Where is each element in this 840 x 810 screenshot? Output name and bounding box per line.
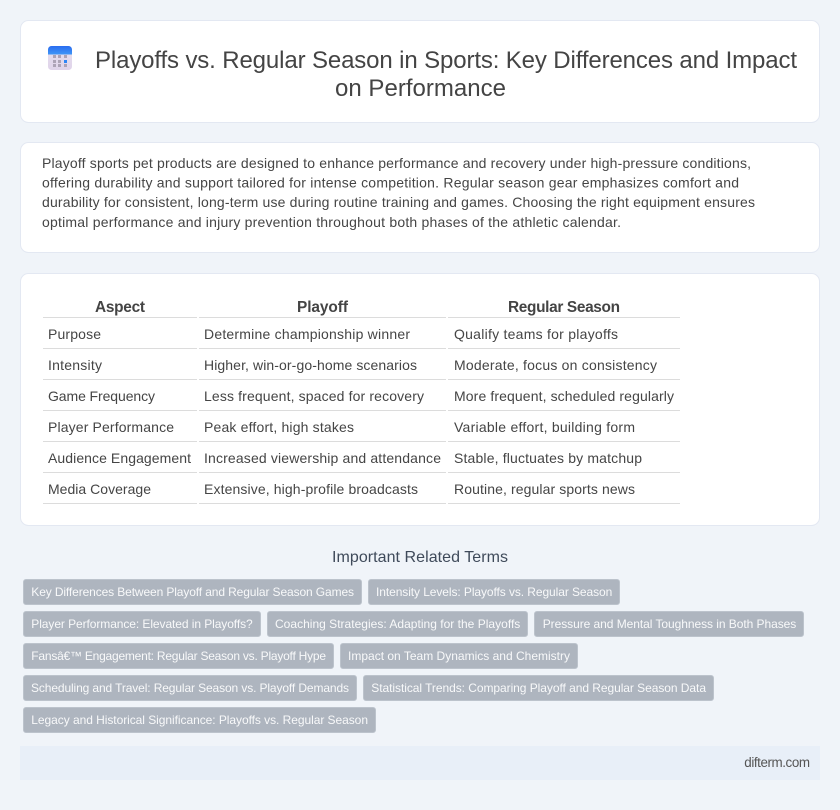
tag bbox=[24, 676, 356, 700]
text block: description bbox=[42, 155, 755, 230]
text block: description: durability for consistent, long-term use during routine training and games. Choosing the right equipment ensures bbox=[42, 194, 755, 210]
row: intensity: Moderate, focus on consistency bbox=[454, 357, 657, 373]
row: intensity bbox=[48, 357, 657, 373]
heading: related terms: Important Related Terms bbox=[332, 549, 508, 566]
text block: description: offering durability and support tailored for intense competition. Regular season gear emphasizes comfort and bbox=[42, 175, 739, 191]
table header: Regular Season bbox=[508, 299, 620, 316]
tag bbox=[364, 676, 714, 700]
tag: Coaching Strategies: Adapting for the Playoffs bbox=[275, 617, 520, 631]
row: intensity: Intensity bbox=[48, 357, 102, 373]
panel: description bbox=[20, 142, 820, 252]
row: purpose bbox=[48, 326, 618, 342]
tag bbox=[368, 580, 620, 604]
icon: calendar bbox=[48, 46, 72, 70]
row: audience engagement: Audience Engagement bbox=[48, 450, 191, 466]
tag: Player Performance: Elevated in Playoffs? bbox=[31, 617, 253, 631]
tag: Scheduling and Travel: Regular Season vs. Playoff Demands bbox=[31, 681, 349, 695]
text block: description: Playoff sports pet products are designed to enhance performance and recovery under high-pressure conditions, bbox=[42, 155, 751, 171]
row: purpose: Determine championship winner bbox=[204, 326, 410, 342]
tag bbox=[24, 708, 376, 732]
table header: Aspect bbox=[95, 299, 145, 316]
row: audience engagement: Increased viewership and attendance bbox=[204, 450, 441, 466]
row: purpose: Purpose bbox=[48, 326, 101, 342]
row: media coverage bbox=[48, 481, 635, 497]
row: player performance bbox=[48, 419, 635, 435]
row: media coverage: Media Coverage bbox=[48, 481, 151, 497]
title: on Performance bbox=[335, 75, 506, 102]
tag: Impact on Team Dynamics and Chemistry bbox=[348, 649, 570, 663]
footer: difterm.com bbox=[744, 755, 810, 770]
panel: comparison table bbox=[20, 274, 820, 526]
row: player performance: Peak effort, high stakes bbox=[204, 419, 354, 435]
row: media coverage: Extensive, high-profile broadcasts bbox=[204, 481, 418, 497]
table header: Playoff bbox=[297, 299, 349, 316]
row: game frequency bbox=[48, 388, 674, 404]
text block: description: optimal performance and injury prevention throughout both phases of the athletic calendar. bbox=[42, 214, 621, 230]
row: purpose: Qualify teams for playoffs bbox=[454, 326, 618, 342]
tag: Statistical Trends: Comparing Playoff and Regular Season Data bbox=[371, 681, 706, 695]
tag: Pressure and Mental Toughness in Both Phases bbox=[543, 617, 796, 631]
tag: Fansâ€™ Engagement: Regular Season vs. Playoff Hype bbox=[31, 649, 326, 663]
tag: Intensity Levels: Playoffs vs. Regular Season bbox=[376, 585, 612, 599]
tag bbox=[24, 612, 260, 636]
row: player performance: Variable effort, building form bbox=[454, 419, 635, 435]
title: Playoffs vs. Regular Season in Sports: Key Differences and Impact bbox=[95, 47, 797, 74]
tag bbox=[24, 580, 362, 604]
tag: Key Differences Between Playoff and Regular Season Games bbox=[31, 585, 354, 599]
row: intensity: Higher, win-or-go-home scenarios bbox=[204, 357, 417, 373]
row: game frequency: Less frequent, spaced for recovery bbox=[204, 388, 424, 404]
row: game frequency: More frequent, scheduled regularly bbox=[454, 388, 674, 404]
row: audience engagement bbox=[48, 450, 642, 466]
footer bbox=[20, 746, 820, 780]
tag bbox=[340, 644, 578, 668]
title bbox=[95, 47, 797, 102]
row: player performance: Player Performance bbox=[48, 419, 174, 435]
row: media coverage: Routine, regular sports news bbox=[454, 481, 635, 497]
tag bbox=[24, 644, 334, 668]
tag bbox=[268, 612, 528, 636]
tag group: related terms bbox=[24, 580, 804, 732]
tag: Legacy and Historical Significance: Playoffs vs. Regular Season bbox=[31, 713, 368, 727]
row: audience engagement: Stable, fluctuates by matchup bbox=[454, 450, 642, 466]
panel: header bbox=[20, 20, 820, 122]
table header bbox=[95, 299, 620, 316]
tag bbox=[534, 612, 804, 636]
row: game frequency: Game Frequency bbox=[48, 388, 155, 404]
